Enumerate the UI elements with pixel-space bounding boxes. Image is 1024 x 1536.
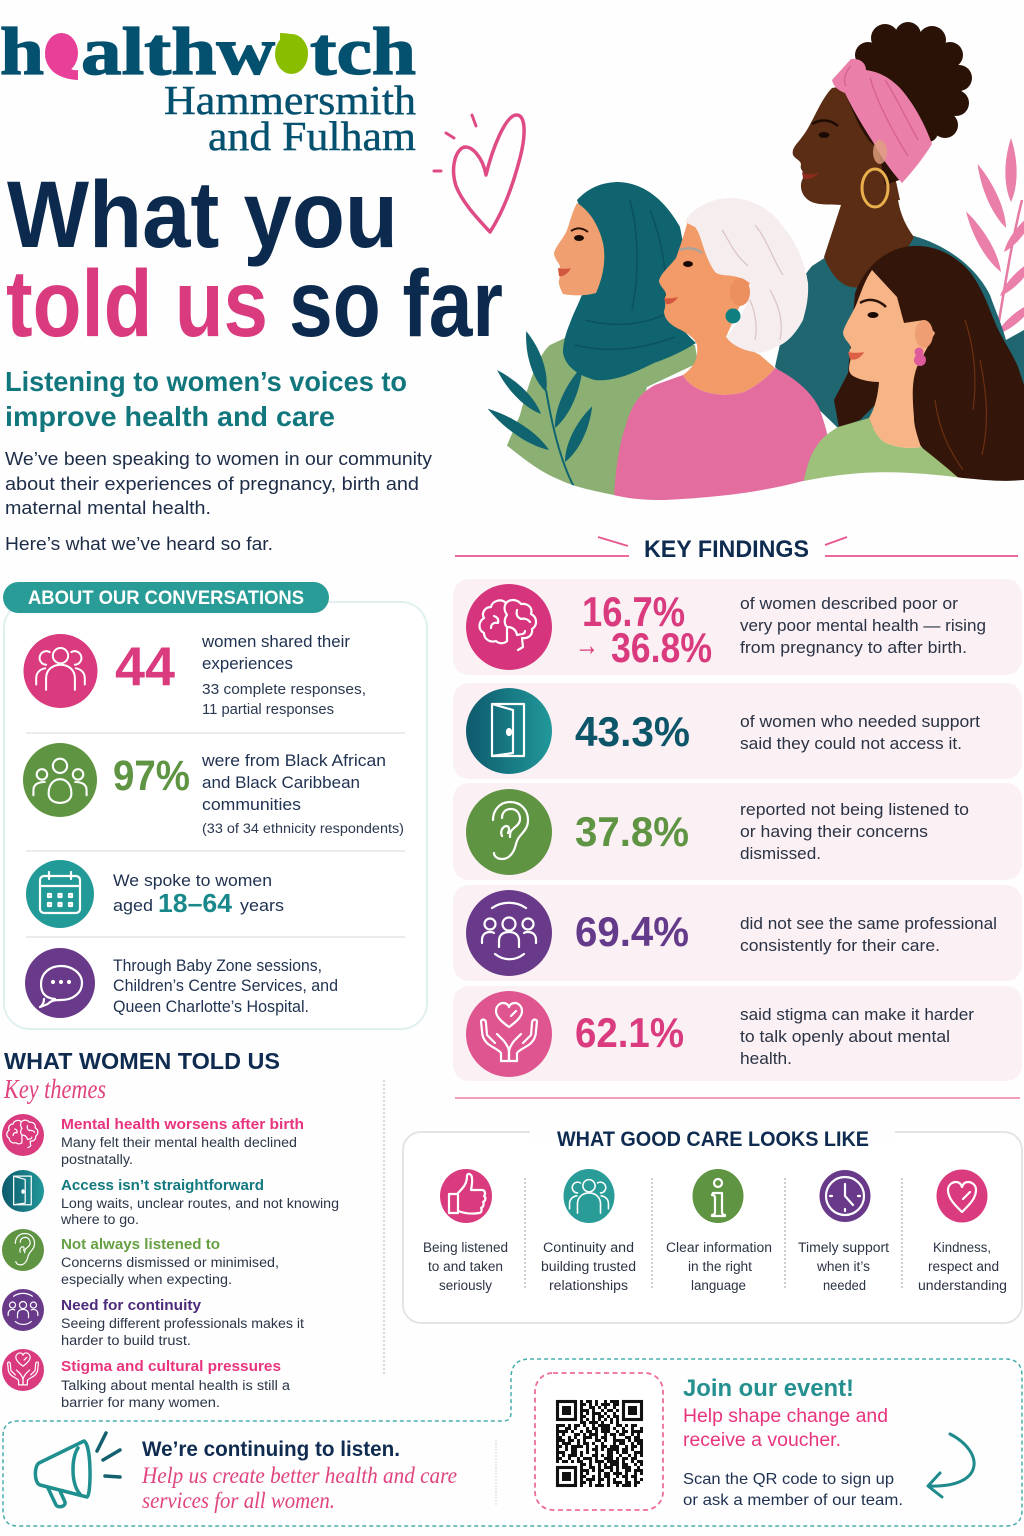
logo: Healthwatch Hammersmith and Fulham: tch [310, 13, 416, 89]
finding: access 43.3: said they could not access it. [740, 734, 962, 753]
intro text: maternal mental health. [5, 497, 211, 518]
item: continuity: building trusted [541, 1259, 636, 1274]
title: so far [289, 251, 503, 357]
finding: mental health 16.7 to 36.8 [453, 579, 1022, 675]
item: being listened to: Being listened [423, 1240, 508, 1255]
theme: mental health [2, 1114, 304, 1167]
logo: Healthwatch Hammersmith and Fulham [0, 13, 416, 159]
row: 44 women: 33 complete responses, [202, 682, 366, 698]
text: join our event: Join our event! [683, 1375, 854, 1402]
panel: what good care looks like [403, 1125, 1022, 1323]
subtitle: Listening to women’s voices to [5, 366, 407, 397]
icon: hand-drawn heart [434, 115, 524, 232]
theme: access: Long waits, unclear routes, and not knowing [61, 1196, 339, 1211]
title: What you [7, 162, 398, 268]
item: clear information: language [691, 1278, 746, 1293]
row: aged 18-64: years [240, 897, 284, 915]
item: being listened to: to and taken [428, 1259, 503, 1274]
finding: continuity 69.4: consistently for their care. [740, 936, 940, 955]
row: aged 18-64: We spoke to women [113, 872, 272, 890]
row: where we spoke: Children’s Centre Services, and [113, 977, 338, 995]
item: clear information [666, 1169, 772, 1293]
figure: woman with long dark hair [803, 246, 1024, 486]
row: 97%: were from Black African [201, 752, 386, 770]
arrow: curved to QR [928, 1434, 974, 1497]
theme: mental health: postnatally. [61, 1152, 133, 1167]
finding: stigma 62.1: said stigma can make it harder [740, 1005, 974, 1024]
theme: continuity: harder to build trust. [61, 1333, 191, 1348]
row: 44 women [24, 633, 366, 718]
row: 97%: 97% [113, 752, 190, 800]
subtitle [5, 366, 407, 432]
item: timely support [798, 1170, 889, 1293]
row: 44 women: women shared their [201, 633, 351, 651]
item: continuity: relationships [549, 1278, 628, 1293]
finding: mental health 16.7 to 36.8: 16.7% [582, 588, 685, 635]
heading: key findings [455, 536, 1018, 563]
theme: stigma: Stigma and cultural pressures [61, 1358, 281, 1375]
row: 97% [23, 743, 404, 836]
QR code [535, 1373, 663, 1510]
row: aged 18-64: 18–64 [158, 888, 233, 918]
heading: what women told us [3, 1048, 280, 1104]
theme: continuity: Seeing different professionals makes it [61, 1316, 304, 1331]
item: continuity: Continuity and [543, 1240, 634, 1255]
finding: access 43.3: of women who needed support [740, 712, 980, 731]
finding: stigma 62.1: 62.1% [575, 1009, 684, 1056]
finding: continuity 69.4: did not see the same professional [740, 914, 997, 933]
text: join our event: or ask a member of our team. [683, 1492, 903, 1509]
intro text: Here’s what we’ve heard so far. [5, 533, 273, 554]
theme: listened to: especially when expecting. [61, 1272, 232, 1287]
finding: mental health 16.7 to 36.8: from pregnancy to after birth. [740, 638, 967, 657]
theme: access: where to go. [60, 1212, 139, 1227]
plant: pink leaves [961, 138, 1024, 337]
finding: continuity 69.4 [453, 885, 1022, 981]
item: clear information: in the right [688, 1259, 752, 1274]
theme: continuity [2, 1289, 304, 1348]
finding: access 43.3 [453, 683, 1022, 779]
theme: mental health: Many felt their mental health declined [61, 1135, 297, 1150]
row: aged 18-64: aged [113, 897, 153, 915]
row: 97%: communities [202, 796, 301, 814]
item: continuity [541, 1169, 636, 1293]
finding: listened 37.8: or having their concerns [740, 822, 928, 841]
theme: listened to [2, 1229, 279, 1287]
finding: stigma 62.1 [453, 986, 1022, 1081]
item: timely support: needed [823, 1278, 866, 1293]
row: 44 women: 44 [115, 635, 175, 697]
row: 44 women: experiences [202, 655, 293, 673]
item: kindness: respect and [928, 1259, 999, 1274]
row: 44 women: 11 partial responses [202, 702, 334, 718]
heading: what women told us: Key themes [3, 1074, 106, 1104]
logo: Healthwatch Hammersmith and Fulham: and Fulham [208, 113, 416, 159]
theme: stigma: barrier for many women. [61, 1395, 220, 1410]
text: continuing to listen [141, 1438, 457, 1513]
theme: listened to: Not always listened to [61, 1236, 220, 1253]
panel: call to action [3, 1359, 1022, 1526]
row: 97%: (33 of 34 ethnicity respondents) [202, 821, 404, 836]
intro text: We’ve been speaking to women in our community [5, 448, 433, 469]
theme: continuity: Need for continuity [61, 1297, 202, 1314]
icon: megaphone [35, 1433, 120, 1507]
item: being listened to [423, 1169, 508, 1293]
heading pill: ABOUT OUR CONVERSATIONS [28, 588, 304, 609]
item: kindness [918, 1170, 1007, 1293]
text: join our event [683, 1375, 903, 1509]
theme: access [2, 1170, 339, 1227]
finding: listened 37.8: 37.8% [575, 808, 689, 855]
text: continuing to listen: services for all women. [142, 1488, 335, 1513]
figure: woman with pink headband [775, 22, 1024, 430]
finding: stigma 62.1: to talk openly about mental [740, 1027, 950, 1046]
theme: access: Access isn’t straightforward [61, 1177, 264, 1194]
item: being listened to: seriously [439, 1278, 492, 1293]
text: continuing to listen: Help us create better health and care [141, 1463, 457, 1488]
illustration: four women in profile [484, 22, 1024, 505]
row: where we spoke: Queen Charlotte’s Hospital. [113, 998, 309, 1016]
finding: stigma 62.1: health. [740, 1049, 792, 1068]
finding: continuity 69.4: 69.4% [575, 908, 689, 955]
logo: Healthwatch Hammersmith and Fulham: h [0, 13, 44, 89]
finding: listened 37.8: dismissed. [740, 844, 821, 863]
plant: teal leaves [484, 329, 597, 487]
heading pill [3, 582, 329, 613]
item: timely support: when it’s [816, 1259, 870, 1274]
panel: about our conversations [3, 582, 427, 1029]
heading: what women told us: WHAT WOMEN TOLD US [4, 1048, 280, 1074]
row: 97%: and Black Caribbean [202, 774, 360, 792]
text: join our event: Help shape change and [683, 1406, 888, 1427]
theme: stigma: Talking about mental health is still a [61, 1378, 291, 1393]
item: kindness: understanding [918, 1278, 1007, 1293]
row: aged 18-64 [26, 860, 284, 928]
text: join our event: Scan the QR code to sign up [683, 1471, 894, 1488]
theme: listened to: Concerns dismissed or minimised, [61, 1255, 279, 1270]
finding: mental health 16.7 to 36.8: of women described poor or [740, 594, 958, 613]
finding: mental health 16.7 to 36.8: → [575, 629, 599, 662]
item: clear information: Clear information [666, 1240, 772, 1255]
panel: key findings [453, 579, 1022, 1081]
intro text: about their experiences of pregnancy, birth and [5, 473, 419, 494]
title: told us [6, 251, 268, 357]
item: timely support: Timely support [798, 1240, 889, 1255]
figure: woman with white hair [614, 198, 828, 505]
finding: listened 37.8 [453, 783, 1022, 880]
row: where we spoke [25, 948, 338, 1018]
row: where we spoke: Through Baby Zone sessions, [113, 957, 322, 975]
subtitle: improve health and care [5, 401, 335, 432]
heading: key findings: KEY FINDINGS [644, 536, 809, 563]
item: kindness: Kindness, [933, 1240, 991, 1255]
intro text [5, 448, 433, 554]
finding: mental health 16.7 to 36.8: 36.8% [611, 624, 712, 671]
text: join our event: receive a voucher. [683, 1430, 841, 1451]
logo: Healthwatch Hammersmith and Fulham: althw [81, 13, 275, 89]
title [6, 162, 503, 357]
theme: mental health: Mental health worsens after birth [61, 1116, 304, 1133]
text: continuing to listen: We’re continuing to listen. [142, 1438, 400, 1461]
panel: key themes list [2, 1114, 339, 1410]
logo: Healthwatch Hammersmith and Fulham: Hammersmith [164, 77, 416, 123]
finding: mental health 16.7 to 36.8: very poor mental health — rising [740, 616, 986, 635]
theme: stigma [2, 1349, 291, 1410]
finding: access 43.3: 43.3% [575, 708, 690, 755]
figure: woman with teal hijab [505, 182, 698, 500]
finding: listened 37.8: reported not being listened to [740, 800, 969, 819]
heading: WHAT GOOD CARE LOOKS LIKE [557, 1128, 869, 1151]
